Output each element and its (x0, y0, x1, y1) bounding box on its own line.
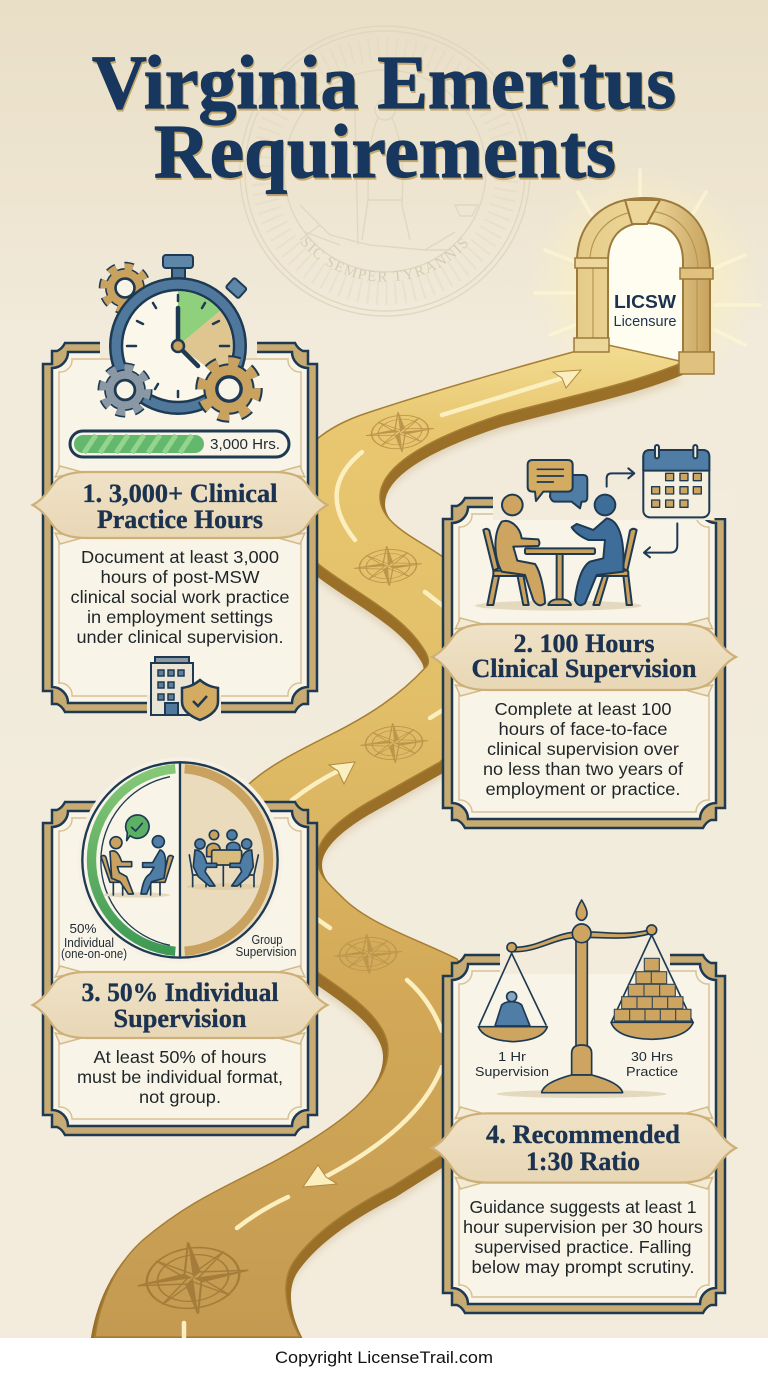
icon: one-on-one session (101, 815, 173, 898)
scale labels: 1 Hr (498, 1050, 526, 1064)
heading ribbon: 3. 50% Individual (82, 978, 278, 1007)
title: Virginia Emeritus (92, 41, 676, 125)
body text: Document at least 3,000 (81, 547, 279, 567)
panel: step 2 clinical supervision (432, 445, 736, 828)
chart: 50/50 split circle (77, 757, 283, 963)
progress bar: 3,000 Hrs. (210, 436, 280, 453)
watermark: state seal (240, 26, 530, 317)
heading ribbon: 1. 3,000+ Clinical (82, 479, 278, 508)
heading ribbon: Practice Hours (97, 505, 263, 534)
road arrowheads (303, 370, 581, 1187)
winding road (95, 345, 684, 1354)
body text: hour supervision per 30 hours (463, 1217, 703, 1237)
body text (483, 699, 683, 799)
heading ribbon (432, 618, 736, 696)
body text: no less than two years of (483, 759, 683, 779)
arch: LICSW Licensure destination: LICSW (614, 292, 676, 312)
panel: step 4 recommended ratio (432, 900, 736, 1313)
body text: Complete at least 100 (494, 699, 672, 719)
body text: hours of post-MSW (100, 567, 260, 587)
icon: two people at table with calendar (475, 445, 709, 611)
heading ribbon (432, 1107, 736, 1189)
road compass markers (133, 409, 436, 1321)
heading ribbon: 1:30 Ratio (526, 1147, 640, 1176)
body text: clinical supervision over (487, 739, 679, 759)
body text (70, 547, 290, 647)
body text: must be individual format, (77, 1067, 283, 1087)
icon: balance scale (478, 900, 693, 1098)
progress bar (70, 431, 289, 457)
body text: in employment settings (87, 607, 273, 627)
road centre dashes (184, 377, 566, 1337)
heading ribbon (33, 466, 327, 544)
body text: Guidance suggests at least 1 (470, 1197, 696, 1217)
footer (0, 1338, 768, 1376)
chart labels: 50% (70, 922, 96, 936)
footer: Copyright LicenseTrail.com (275, 1348, 493, 1367)
heading ribbon: 4. Recommended (486, 1120, 681, 1149)
body text (463, 1197, 703, 1277)
chart labels: Group (252, 933, 283, 947)
heading ribbon: Supervision (114, 1004, 247, 1033)
icon: office building and shield (151, 657, 218, 720)
body text: clinical social work practice (70, 587, 290, 607)
chart labels: Supervision (236, 945, 297, 959)
arch: LICSW Licensure destination: Licensure (614, 314, 676, 330)
panel: step 1 clinical practice hours (33, 255, 327, 720)
icon: group session (187, 830, 260, 890)
heading ribbon: 2. 100 Hours (514, 629, 654, 658)
chart labels: Individual (64, 936, 114, 950)
body text: under clinical supervision. (76, 627, 284, 647)
watermark: state seal: SIC SEMPER TYRANNIS (301, 238, 468, 282)
body text: employment or practice. (486, 779, 680, 799)
arch: LICSW Licensure destination (574, 198, 714, 374)
title (92, 41, 676, 194)
body text: not group. (139, 1087, 221, 1107)
scale labels: Supervision (475, 1065, 549, 1079)
icon: stopwatch with gears (103, 255, 256, 416)
chart labels (61, 922, 297, 961)
heading ribbon: Clinical Supervision (472, 654, 697, 683)
scale labels: 30 Hrs (631, 1050, 673, 1064)
glow behind arch (525, 165, 765, 405)
body text: At least 50% of hours (94, 1047, 267, 1067)
body text (77, 1047, 283, 1107)
scale labels (475, 1050, 678, 1079)
chart labels: (one-on-one) (61, 947, 127, 961)
body text: supervised practice. Falling (474, 1237, 692, 1257)
title: Requirements (154, 110, 616, 194)
heading ribbon (33, 966, 327, 1044)
panel: step 3 individual supervision (33, 757, 327, 1135)
body text: hours of face-to-face (498, 719, 668, 739)
body text: below may prompt scrutiny. (472, 1257, 694, 1277)
scale labels: Practice (626, 1065, 678, 1079)
